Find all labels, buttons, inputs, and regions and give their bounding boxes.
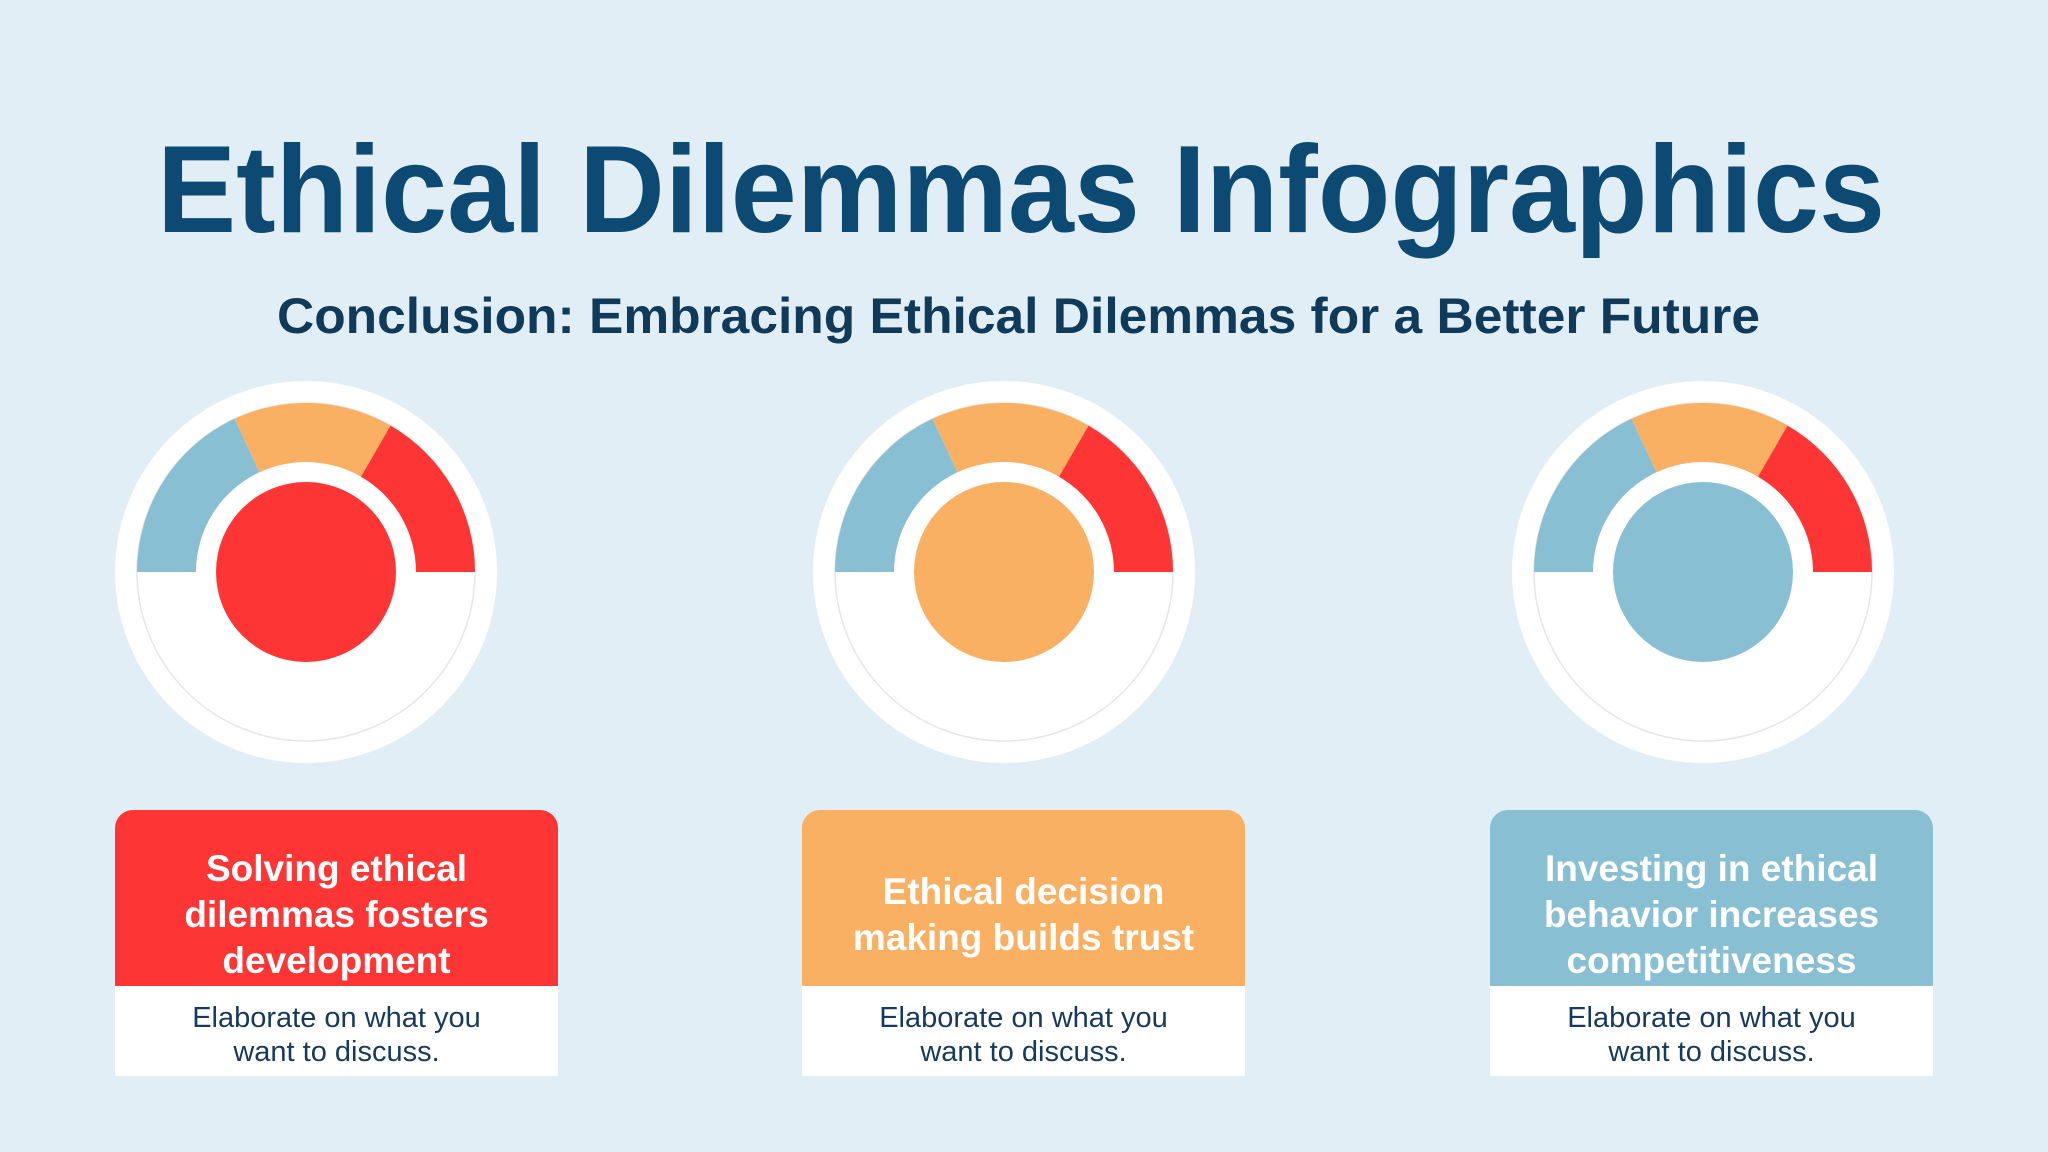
card 3: Investing in ethical behavior increases competitiveness: [1544, 848, 1879, 981]
gauges: [115, 381, 1894, 763]
card 2: Ethical decision making builds trust: [853, 871, 1194, 958]
card 1: want to discuss.: [233, 1036, 440, 1068]
card 2: want to discuss.: [920, 1036, 1127, 1068]
gauge 2: [813, 381, 1195, 763]
card 3: want to discuss.: [1608, 1036, 1815, 1068]
card 2: [802, 810, 1245, 1076]
card 2: Elaborate on what you: [879, 1002, 1168, 1034]
title: Ethical Dilemmas Infographics: [157, 121, 1885, 259]
gauge 3: [1512, 381, 1894, 763]
gauge 1: [115, 381, 497, 763]
card 1: Solving ethical dilemmas fosters development: [184, 848, 489, 981]
card 3: [1490, 810, 1933, 1076]
subtitle: Conclusion: Embracing Ethical Dilemmas for a Better Future: [277, 288, 1760, 344]
card 1: Elaborate on what you: [192, 1002, 481, 1034]
card 3: Elaborate on what you: [1567, 1002, 1856, 1034]
card 1: [115, 810, 558, 1076]
